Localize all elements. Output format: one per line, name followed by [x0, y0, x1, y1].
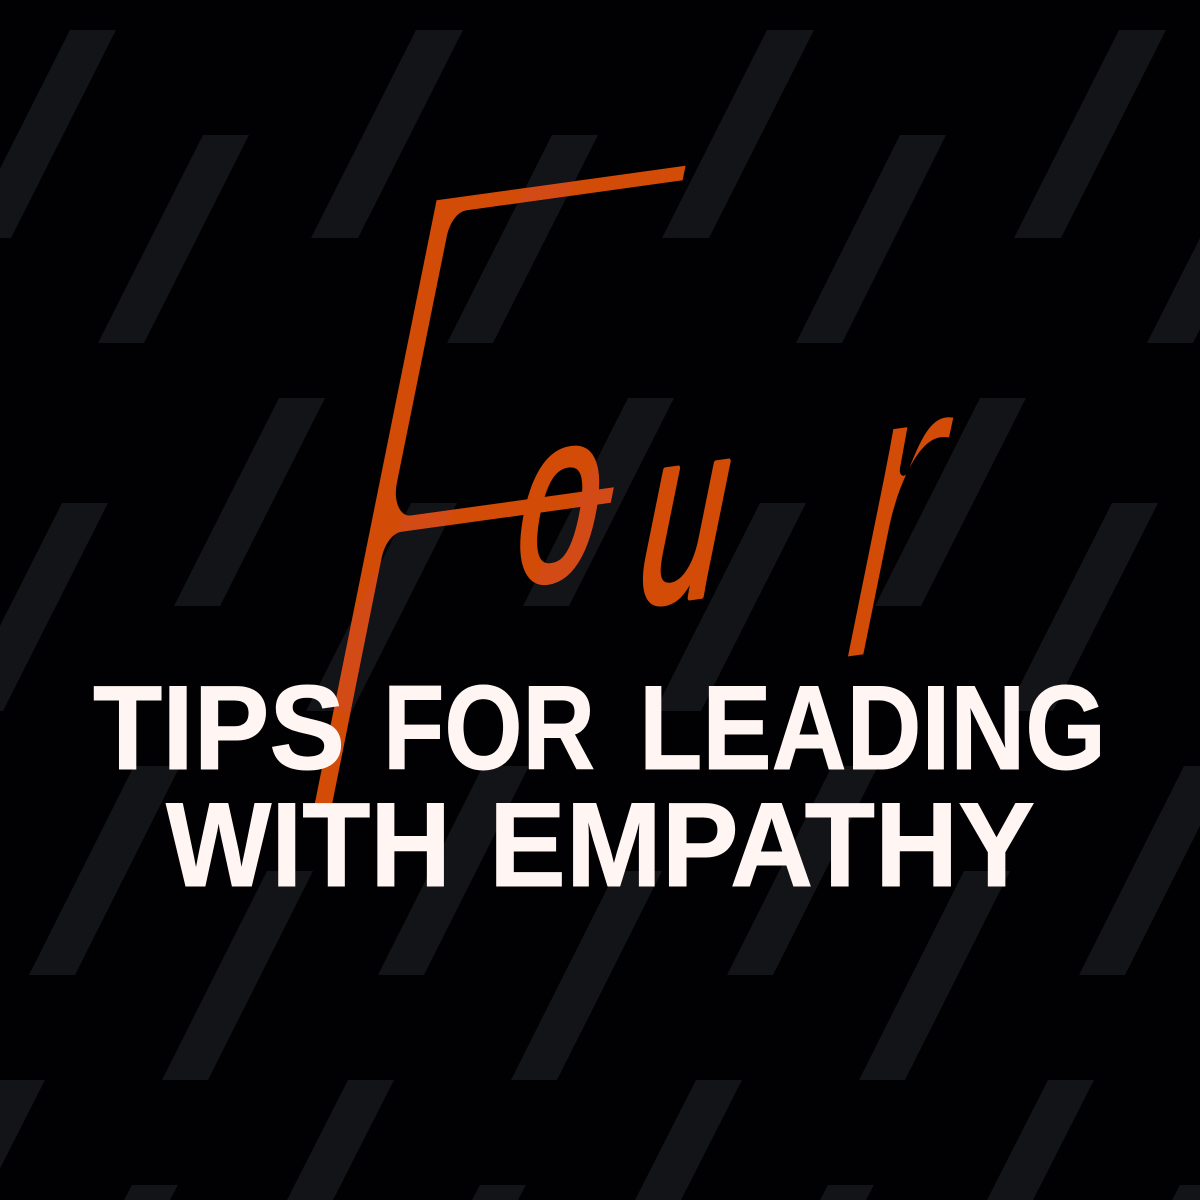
title line 2: WITH: [166, 778, 451, 912]
script word: Four: o: [509, 357, 613, 636]
script word: Four: r: [829, 244, 976, 761]
script word: Four: u: [631, 368, 740, 659]
title line 2: EMPATHY: [489, 778, 1035, 912]
script word: Four: [255, 0, 1007, 1042]
title: [93, 661, 1106, 912]
title line 1: TIPS: [93, 661, 345, 795]
title line 1: LEADING: [639, 661, 1106, 795]
title line 1: FOR: [383, 661, 595, 795]
